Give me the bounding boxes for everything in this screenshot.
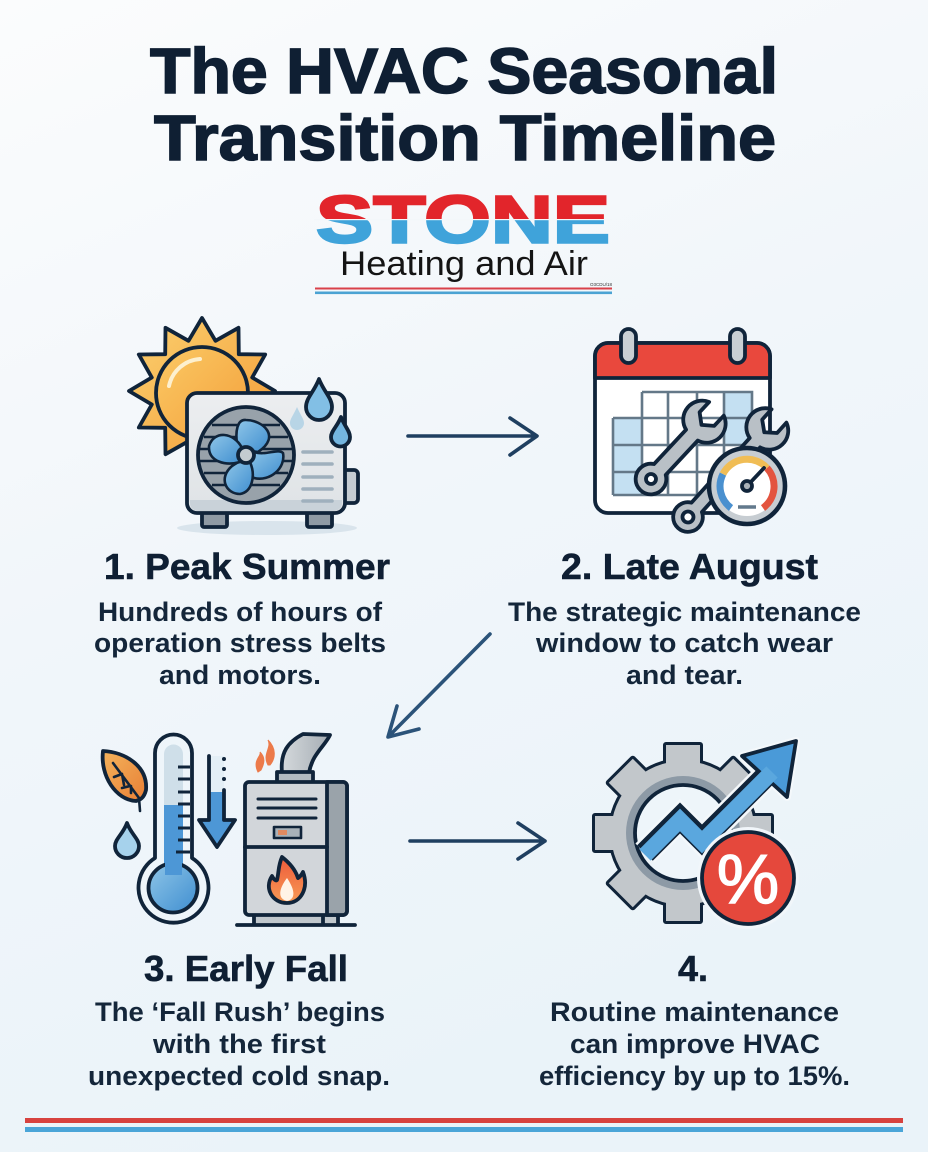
logo split line <box>314 219 612 220</box>
furnace divider <box>245 845 327 849</box>
percent badge <box>697 827 799 929</box>
step 4 body <box>539 997 850 1091</box>
AC lower shade <box>190 500 342 511</box>
calendar rings <box>621 329 636 363</box>
flue collar <box>277 772 313 783</box>
fan hub <box>238 447 254 463</box>
title <box>150 35 778 174</box>
step 4 body: can improve HVAC <box>570 1029 820 1059</box>
logo red rule <box>315 288 612 290</box>
step 2 text <box>508 546 861 690</box>
AC side box <box>340 470 358 503</box>
logo blue rule <box>315 292 612 294</box>
icon: calendar with wrenches and gauge <box>595 329 795 542</box>
flame <box>269 857 305 903</box>
furnace side panel <box>327 782 347 915</box>
calendar highlighted cells <box>613 392 752 495</box>
down arrow <box>199 756 235 847</box>
sun rays <box>129 318 275 464</box>
step 1 body <box>94 597 386 690</box>
step 4 text <box>539 948 850 1091</box>
leaf <box>103 751 146 811</box>
arrow: step 3 to step 4 <box>410 823 545 859</box>
thermometer ticks <box>176 767 190 852</box>
furnace base <box>237 915 355 925</box>
water drop small <box>331 417 350 446</box>
icon: gear with growth arrow and percent badge <box>595 741 799 929</box>
title: Transition Timeline <box>154 102 776 174</box>
icon: thermometer and furnace <box>103 734 355 925</box>
furnace body <box>245 782 347 915</box>
calendar grid <box>613 392 752 495</box>
AC shadow <box>177 521 357 535</box>
step 2 body <box>508 597 861 690</box>
thermometer outline <box>138 735 208 923</box>
calendar header <box>595 343 770 378</box>
fan grille <box>198 407 294 503</box>
wrench front <box>624 394 733 505</box>
step 1 body: and motors. <box>159 660 321 690</box>
water drop large <box>306 379 332 420</box>
icon: sun and AC unit <box>129 318 358 535</box>
step 3 body <box>88 997 390 1091</box>
step 2 body: and tear. <box>626 660 743 690</box>
logo wordmark: STONE <box>316 182 610 258</box>
step 3 body: The ‘Fall Rush’ begins <box>95 997 385 1027</box>
step 3 heading: 3. Early Fall <box>144 948 348 989</box>
furnace vents <box>258 799 316 818</box>
step 4 body: efficiency by up to 15%. <box>539 1061 850 1091</box>
calendar body <box>595 343 770 513</box>
step 1 body: Hundreds of hours of <box>98 597 383 627</box>
AC body <box>187 393 345 513</box>
vent lines <box>303 452 332 501</box>
furnace indicator <box>274 827 301 838</box>
heat squiggle <box>256 740 274 772</box>
step 4 heading: 4. <box>678 948 708 989</box>
step 1 heading: 1. Peak Summer <box>104 546 390 587</box>
step 2 body: The strategic maintenance <box>508 597 861 627</box>
step 3 body: unexpected cold snap. <box>88 1061 390 1091</box>
sun disc <box>156 347 248 439</box>
step 4 body: Routine maintenance <box>550 997 839 1027</box>
flue pipe <box>282 734 330 773</box>
logo: Stone Heating and Air <box>314 182 612 294</box>
step 1 body: operation stress belts <box>94 628 386 658</box>
title: The HVAC Seasonal <box>150 35 778 107</box>
gear <box>595 745 771 921</box>
percent badge: % <box>717 840 779 918</box>
step 1 text <box>94 546 390 690</box>
step 2 body: window to catch wear <box>535 628 834 658</box>
wrench back <box>662 401 795 542</box>
growth arrow <box>645 741 796 855</box>
thermometer bulb <box>148 864 198 912</box>
arrow: step 1 to step 2 <box>408 418 537 455</box>
thermometer liquid <box>164 805 183 870</box>
logo fine print: O3CDU/18 <box>590 282 612 287</box>
thermometer tube <box>164 744 183 805</box>
AC feet <box>202 510 227 527</box>
arrow: step 2 to step 3 <box>388 634 490 737</box>
water drop <box>115 823 139 858</box>
gauge <box>709 448 785 524</box>
sun highlight <box>169 359 200 386</box>
logo subtitle: Heating and Air <box>340 245 588 283</box>
fan blades <box>209 420 283 494</box>
step 2 heading: 2. Late August <box>561 546 818 587</box>
step 3 body: with the first <box>152 1029 326 1059</box>
footer bars <box>25 1118 903 1132</box>
faint droplet <box>290 407 304 430</box>
step 3 text <box>88 948 390 1091</box>
